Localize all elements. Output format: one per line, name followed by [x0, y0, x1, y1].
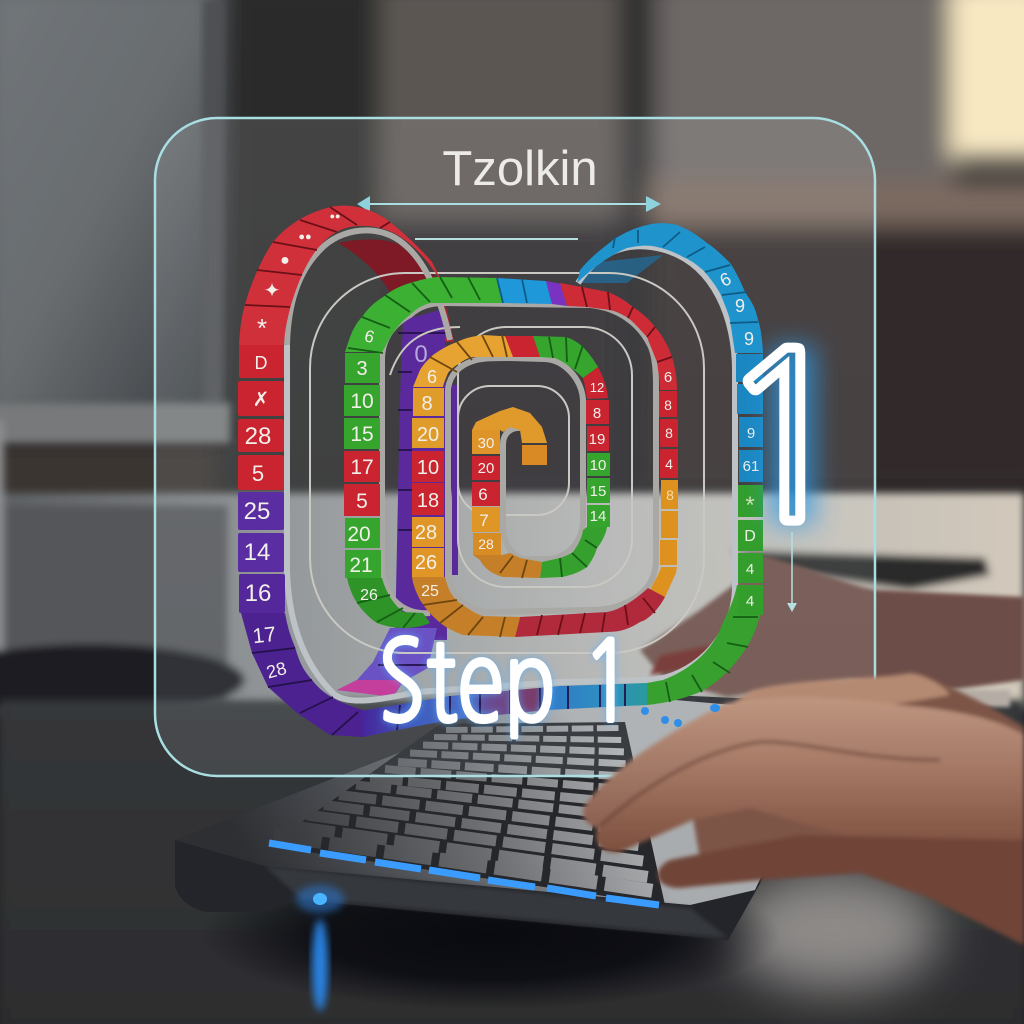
front hand: [583, 673, 1024, 945]
keyboard front lip: [265, 866, 728, 938]
outer ring: left column tiles: 28: [245, 423, 271, 450]
ring three: top and right side: 10: [590, 457, 606, 474]
palm: [690, 673, 1024, 945]
ring two: green start: 3: [356, 358, 368, 380]
ring two: top and right side: 8: [664, 397, 672, 413]
outer ring: green lower right: 4: [746, 593, 754, 610]
ring two: top and right side: [497, 278, 678, 597]
outer ring: blue upper right: [577, 223, 763, 482]
ring two: top and right side: 8: [665, 425, 673, 441]
keyboard: [175, 690, 791, 1011]
ring three: top and right side: 15: [590, 483, 606, 500]
key bed: [268, 722, 665, 905]
ring three: top and right side: 14: [590, 508, 606, 525]
back strands: 0: [414, 341, 428, 368]
outer ring: green lower right: *: [745, 492, 755, 519]
arrow: connector line: [415, 238, 578, 240]
key rows: [274, 728, 660, 892]
ring four: inner orange hook: 20: [478, 460, 494, 477]
arrow: downward indicator: [787, 532, 797, 612]
step label: Step 1: Step 1: [378, 626, 634, 738]
ring three: orange left column: 28: [415, 522, 437, 544]
ring two: green start: 6: [362, 326, 376, 347]
arch icon glyphs: ●●: [330, 211, 340, 221]
ring two: green start: 26: [360, 587, 378, 604]
ring two: top and right side: 6: [664, 369, 672, 386]
ring two: green start: 10: [350, 390, 374, 413]
ring three: orange left column: 26: [415, 552, 437, 574]
keyboard body: [175, 690, 791, 940]
blue key glow dots: [641, 704, 720, 727]
ring three: top and right side: [505, 336, 610, 578]
outer ring: blue upper right: 6: [717, 268, 734, 291]
outer ring: left column tiles: 16: [245, 580, 271, 607]
back strands: [337, 239, 663, 697]
outer ring: left column tiles: ✗: [253, 389, 269, 411]
large step numeral 1: 1: [715, 322, 855, 554]
outer ring: green lower right: D: [744, 528, 756, 545]
LED reflection: [312, 919, 328, 1011]
ring two: top and right side: 8: [666, 487, 674, 503]
outer ring: left column tiles: D: [254, 353, 268, 373]
outer ring: red arch: [239, 206, 447, 345]
outer ring: left column tiles: 25: [244, 498, 270, 525]
outer ring: purple bottom left: 17: [252, 623, 277, 648]
index finger: [596, 742, 1024, 870]
ring two: green start: 5: [356, 490, 368, 513]
ring four: inner orange hook: 28: [478, 536, 494, 552]
ring four: inner orange hook: [472, 407, 547, 578]
outer ring: blue upper right: 9: [744, 329, 754, 349]
ring two: green start: [344, 277, 503, 628]
ring three: orange left column: 20: [417, 424, 439, 446]
back finger: [720, 673, 950, 720]
outer ring: green lower right: 4: [746, 561, 754, 578]
rear hand: [640, 556, 1024, 707]
outer ring: green lower right: [647, 485, 763, 705]
arch icon glyphs: ✦: [264, 280, 280, 302]
power LED glow: [296, 885, 344, 913]
ring three: orange left column: 6: [427, 367, 437, 387]
ring two: green start: 20: [347, 523, 371, 546]
ring three: top and right side: 12: [590, 380, 604, 395]
arch icon glyphs: ●: [280, 252, 290, 269]
ring two: top and right side: 4: [665, 456, 673, 472]
outer ring: blue upper right: 9: [735, 296, 745, 316]
ring three: orange left column: [412, 335, 517, 600]
ring four: inner orange hook: 30: [478, 435, 494, 452]
arrow: width dimension: [357, 196, 661, 212]
arch icon glyphs: *: [257, 313, 267, 343]
outer ring: purple bottom left: [241, 613, 363, 737]
ring two: green start: 17: [350, 456, 374, 479]
step label: Step 1: Step 1: [378, 626, 634, 738]
arch icon glyphs: ●●: [298, 231, 312, 243]
outer ring: left column tiles: 5: [252, 461, 264, 486]
finger creases: [600, 742, 940, 826]
ring three: top and right side: 8: [593, 405, 601, 422]
ring three: orange left column: 18: [417, 490, 439, 512]
ring three: orange left column: 25: [421, 583, 439, 600]
outer ring: left column tiles: 14: [244, 539, 270, 566]
arch icon glyphs: [257, 211, 340, 343]
ring four: inner orange hook: 6: [478, 485, 488, 504]
title: Tzolkin: Tzolkin: [442, 142, 598, 196]
middle finger: [583, 697, 1024, 830]
rails: [287, 230, 735, 701]
shadow under keyboard: [200, 860, 780, 1010]
outer ring: blue upper right: 9: [747, 425, 755, 442]
thin guide lines: [310, 273, 704, 653]
outer ring: purple bottom left: 28: [264, 658, 289, 682]
desk light patch: [730, 870, 940, 990]
ring four: inner orange hook: 7: [479, 511, 489, 530]
glass panel: [155, 118, 875, 776]
ring three: orange left column: 10: [417, 457, 439, 479]
ring two: bottom edge: [412, 577, 665, 637]
outer ring: bottom edge: [360, 683, 647, 737]
thumb: [658, 835, 1024, 945]
ring three: orange left column: 8: [421, 393, 433, 415]
ring two: green start: 15: [350, 423, 374, 446]
outer ring: left column tiles: [238, 345, 285, 613]
ring two: green start: 21: [349, 554, 373, 577]
calendar spiral: [238, 206, 763, 737]
key backlight strips: [269, 843, 659, 905]
ring three: top and right side: 19: [589, 431, 605, 448]
outer ring: blue upper right: 61: [743, 458, 759, 475]
